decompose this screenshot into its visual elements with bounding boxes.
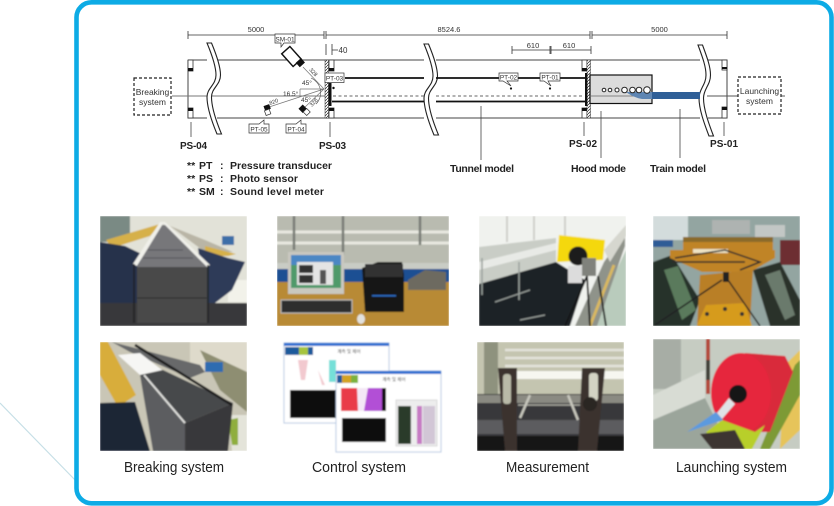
dimension values: 40 (339, 46, 348, 55)
abbreviation legend: : (220, 173, 224, 185)
sound level meter SM-01 (275, 34, 305, 67)
dimension values: 5000 (248, 25, 264, 34)
pressure transducer PT-02: PT-02 (500, 74, 518, 82)
sensor geometry: 45° (301, 96, 311, 104)
abbreviation legend: Sound level meter (230, 186, 324, 198)
photo: measurement setup with tripod (479, 216, 626, 326)
test rig schematic diagram (134, 25, 785, 198)
sensor geometry (266, 67, 335, 108)
part labels: Tunnel model (450, 163, 514, 175)
sensor geometry: 820 (269, 98, 279, 107)
abbreviation legend: ** (187, 173, 196, 185)
abbreviation legend: : (220, 186, 224, 198)
photo: control system computer (277, 216, 449, 326)
pressure transducer PT-03 (325, 73, 344, 82)
tunnel model (328, 73, 588, 106)
photo: measurement brackets (477, 342, 624, 451)
sound level meter SM-01: SM-01 (275, 36, 295, 44)
photo sensor boxes (188, 60, 727, 118)
caption: Control system: Control system (312, 460, 406, 476)
decorative diagonal line (0, 403, 77, 482)
photo sensor labels: PS-01 (710, 139, 738, 150)
pressure transducer PT-04 (286, 104, 310, 134)
break lines (207, 43, 714, 136)
caption: Launching system: Launching system (676, 460, 787, 476)
pressure transducer PT-01 (540, 73, 560, 90)
pressure transducer PT-02 (499, 73, 518, 90)
pressure transducer PT-05 (249, 104, 271, 134)
hood model (590, 75, 652, 104)
dimension values: 8524.6 (438, 25, 460, 34)
photo sensor labels: PS-02 (569, 139, 597, 150)
abbreviation legend: ** (187, 160, 196, 172)
caption: Measurement: Measurement (506, 460, 589, 476)
abbreviation legend (187, 160, 332, 198)
launching system box (738, 77, 785, 114)
breaking system box (134, 78, 171, 115)
photo: breaking system side (100, 342, 247, 451)
abbreviation legend: Photo sensor (230, 173, 298, 185)
part labels (450, 163, 706, 175)
abbreviation legend: ** (187, 186, 196, 198)
launching system box: system (746, 96, 773, 106)
part labels: Hood mode (571, 163, 626, 175)
hatched walls (325, 60, 590, 118)
sensor geometry: 45° (302, 79, 312, 87)
pressure transducer PT-04: PT-04 (287, 126, 305, 134)
train model (652, 92, 700, 99)
caption: Breaking system: Breaking system (124, 460, 224, 476)
sensor geometry: 328 (308, 67, 318, 78)
front window: 계측 및 제어 (382, 376, 406, 383)
wind tunnel rails (172, 60, 738, 118)
abbreviation legend: SM (199, 186, 215, 198)
breaking system box: Breaking (136, 87, 170, 97)
pressure transducer PT-03: PT-03 (326, 76, 344, 82)
photo: launching cylinder top view (653, 216, 800, 326)
dimension values: 610 (563, 41, 575, 50)
leader lines (191, 106, 724, 160)
photo sensor labels: PS-03 (319, 141, 346, 152)
sensor geometry: 16.5° (283, 90, 299, 98)
software screens: control system (284, 343, 441, 452)
back window: 계측 및 제어 (337, 348, 361, 355)
abbreviation legend: Pressure transducer (230, 160, 332, 172)
abbreviation legend: PT (199, 160, 213, 172)
back window (284, 343, 389, 423)
front window (336, 371, 441, 452)
pressure transducer PT-01: PT-01 (541, 74, 559, 82)
photo: breaking system front (100, 216, 247, 326)
part labels: Train model (650, 163, 706, 175)
sensor geometry: 328 (309, 97, 320, 108)
breaking system box: system (139, 97, 166, 107)
photo sensor labels: PS-04 (180, 141, 207, 152)
abbreviation legend: : (220, 160, 224, 172)
dimension lines (188, 31, 727, 55)
pressure transducer PT-05: PT-05 (250, 126, 268, 134)
dimension values: 5000 (651, 25, 668, 34)
dimension values: 610 (527, 41, 539, 50)
photo: launching system red drum (653, 339, 800, 449)
abbreviation legend: PS (199, 173, 213, 185)
dimension values (248, 25, 668, 55)
launching system box: Launching (740, 86, 779, 96)
photo sensor labels (180, 139, 738, 152)
